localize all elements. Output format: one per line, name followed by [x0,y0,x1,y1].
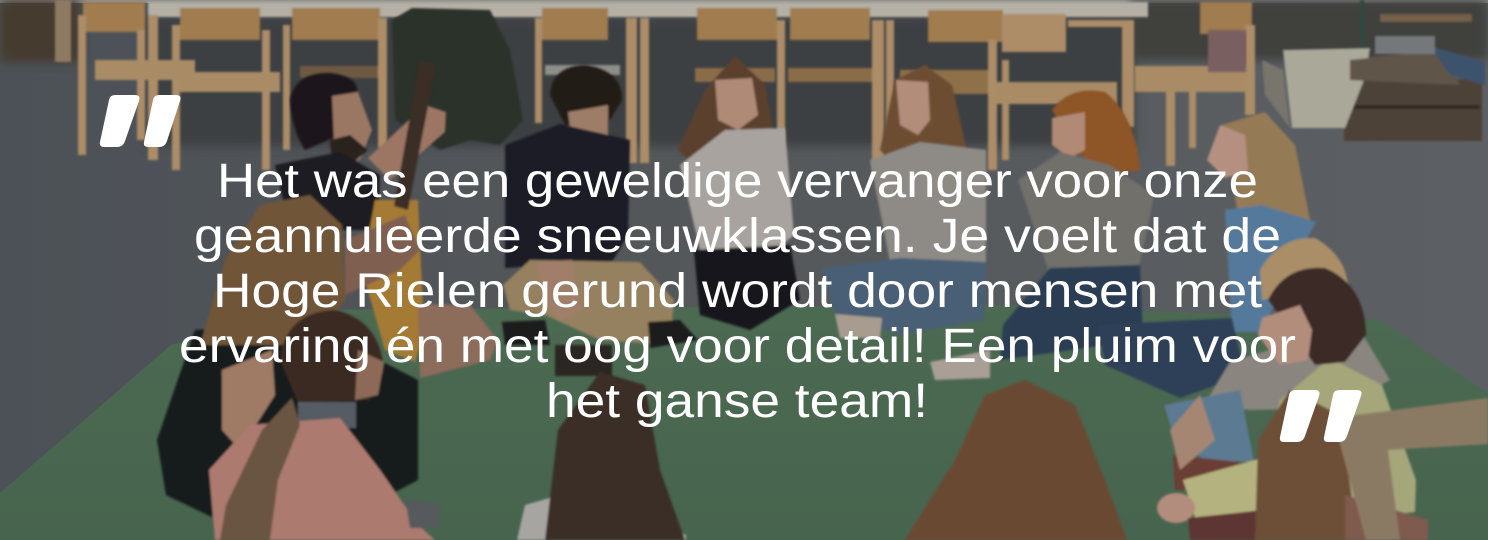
child with yellow cardigan [1157,268,1416,540]
testimonial quote text: Het was een geweldige vervanger voor onze [217,155,1258,208]
child with leopard top [1164,238,1390,490]
girl in white sweater [678,56,800,330]
child in pink jacket [209,310,440,540]
testimonial quote text [179,155,1296,428]
testimonial quote text: het ganse team! [546,375,928,428]
opening quotation mark [100,95,180,147]
testimonial quote text: Hoge Rielen gerund wordt door mensen met [213,265,1262,318]
testimonial quote text: geannuleerde sneeuwklassen. Je voelt dat de [194,210,1281,263]
child with back to camera at right [1255,390,1428,540]
girl in striped top [822,65,986,338]
woman with long hair [157,195,420,520]
testimonial quote text: ervaring én met oog voor detail! Een pluim voor [179,320,1296,373]
closing quotation mark [1280,390,1362,442]
blonde girl in blue dress [1098,112,1316,398]
foreground wooden chair [1333,398,1488,540]
front child with long brown hair [905,380,1127,540]
background photo: bags and crate [1208,30,1485,141]
man in dark polo [502,65,698,376]
guitarist [275,60,498,378]
front child with dark hair [517,372,686,540]
background photo: jacket on chair [392,8,523,150]
girl with red curly hair [930,90,1154,380]
background photo: chairs and tables [55,0,1472,170]
